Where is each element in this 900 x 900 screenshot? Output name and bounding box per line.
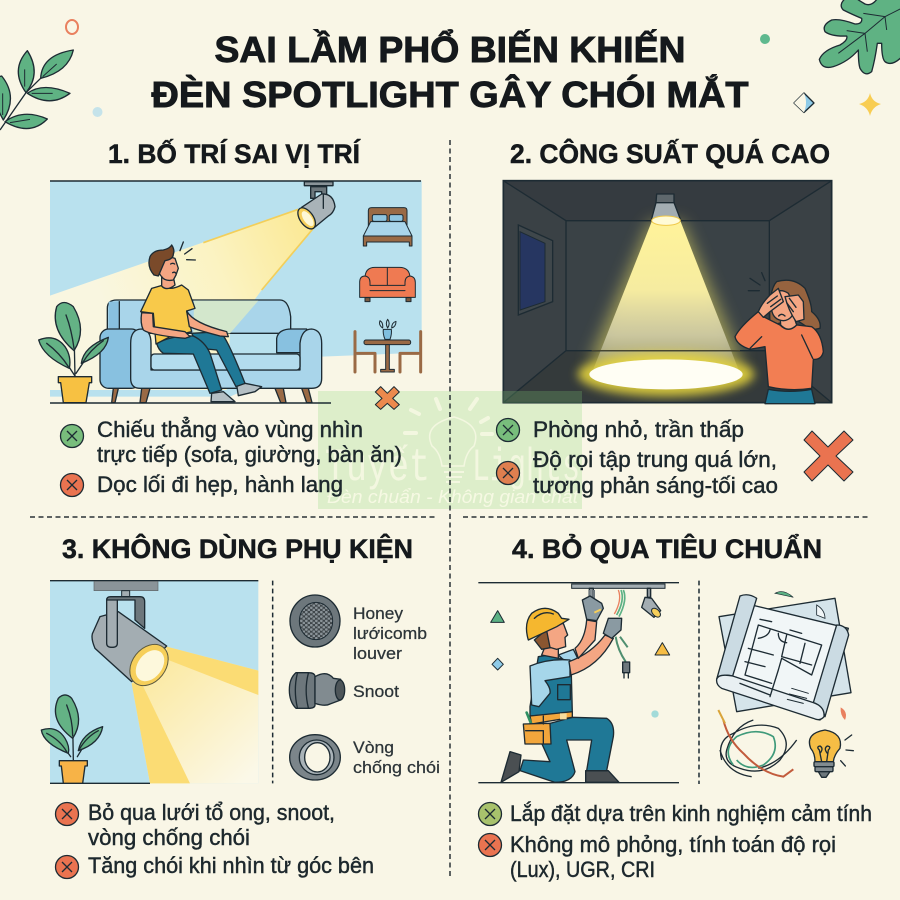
bullets panel 1: Chiếu thẳng vào vùng nhìn bbox=[97, 417, 363, 442]
panel 3: no accessories bbox=[41, 533, 440, 878]
icon: snoot bbox=[289, 673, 345, 708]
decoration: small dots, diamond and star bbox=[66, 20, 881, 117]
accessory labels: lướicomb bbox=[353, 624, 427, 643]
icon: dining table bbox=[355, 319, 421, 372]
illustration: living room with spotlight in the eyes bbox=[39, 181, 422, 403]
heading 3: 3. KHÔNG DÙNG PHỤ KIỆN bbox=[62, 533, 413, 564]
beam glow bbox=[588, 222, 743, 363]
bullets panel 3: vòng chống chói bbox=[88, 825, 250, 850]
bullets panel 1 bbox=[60, 417, 402, 497]
panel 1: wrong placement bbox=[39, 137, 422, 497]
icon: large red cross bbox=[804, 431, 853, 481]
blueprints bbox=[717, 592, 851, 720]
ceiling lamp bbox=[651, 194, 681, 225]
accessory labels: Snoot bbox=[353, 682, 399, 701]
decoration: top right leaf bbox=[819, 0, 900, 74]
icon: sofa bbox=[360, 267, 415, 302]
electrician bbox=[501, 590, 630, 782]
panel 2: excessive power bbox=[496, 138, 853, 498]
furniture icons bbox=[355, 208, 421, 409]
bullets panel 1: Dọc lối đi hẹp, hành lang bbox=[97, 472, 343, 497]
illustration: spotlight without accessories bbox=[41, 581, 273, 783]
watermark: Lights bbox=[472, 442, 580, 494]
icon: orange cross bbox=[375, 387, 399, 409]
panel 4: ignoring standards bbox=[478, 532, 872, 882]
bullets panel 4: (Lux), UGR, CRI bbox=[510, 857, 655, 882]
light beam bbox=[592, 222, 740, 373]
title: ĐÈN SPOTLIGHT GÂY CHÓI MẮT bbox=[152, 73, 749, 115]
bullets panel 2: tương phản sáng-tối cao bbox=[533, 473, 778, 498]
bullets panel 4: Lắp đặt dựa trên kinh nghiệm cảm tính bbox=[510, 801, 872, 826]
bullets panel 2: Độ rọi tập trung quá lớn, bbox=[533, 447, 777, 472]
bullets panel 1: trực tiếp (sofa, giường, bàn ăn) bbox=[97, 442, 402, 467]
person on sofa bbox=[141, 242, 262, 402]
accessory labels bbox=[353, 604, 440, 777]
watermark tint on room corner bbox=[503, 391, 582, 403]
accessory labels: louver bbox=[353, 644, 402, 663]
bullets panel 4 bbox=[478, 801, 872, 882]
heading 1: 1. BỐ TRÍ SAI VỊ TRÍ bbox=[108, 137, 361, 169]
title bbox=[152, 27, 749, 115]
heading 2: 2. CÔNG SUẤT QUÁ CAO bbox=[510, 138, 830, 169]
spotlight fixture bbox=[294, 182, 335, 232]
icon: honeycomb louver bbox=[290, 595, 340, 647]
bullets panel 2 bbox=[496, 417, 778, 498]
illustration: ceiling track and shapes bbox=[478, 581, 699, 784]
accessory labels: Honey bbox=[353, 604, 404, 623]
accessory labels: chống chói bbox=[353, 758, 440, 777]
bullets panel 4: Không mô phỏng, tính toán độ rọi bbox=[510, 832, 836, 857]
bullets panel 2: Phòng nhỏ, trần thấp bbox=[533, 417, 744, 442]
watermark: Đèn chuẩn - Không gian chất bbox=[327, 487, 579, 507]
light bulb icon bbox=[809, 730, 853, 777]
heading 4: 4. BỎ QUA TIÊU CHUẨN bbox=[512, 532, 822, 564]
icon: anti glare ring bbox=[290, 735, 340, 780]
watermark bbox=[318, 391, 582, 509]
section dividers bbox=[30, 140, 871, 877]
woman covering her eyes bbox=[735, 273, 823, 404]
bullets panel 3: Tăng chói khi nhìn từ góc bên bbox=[88, 853, 374, 878]
accessory icons bbox=[289, 595, 345, 780]
accessory labels: Vòng bbox=[353, 738, 394, 757]
bullets panel 3: Bỏ qua lưới tổ ong, snoot, bbox=[88, 800, 335, 825]
bullets panel 3 bbox=[56, 800, 374, 878]
watermark: Tuyết bbox=[325, 442, 430, 494]
title: SAI LẦM PHỔ BIẾN KHIẾN bbox=[214, 27, 686, 70]
icon: bed bbox=[363, 208, 412, 246]
illustration: dark room with strong spotlight bbox=[503, 181, 832, 403]
decoration: left leaf branch bbox=[0, 50, 73, 130]
floor line 1 bbox=[50, 181, 421, 403]
tangled wires bbox=[718, 710, 797, 777]
